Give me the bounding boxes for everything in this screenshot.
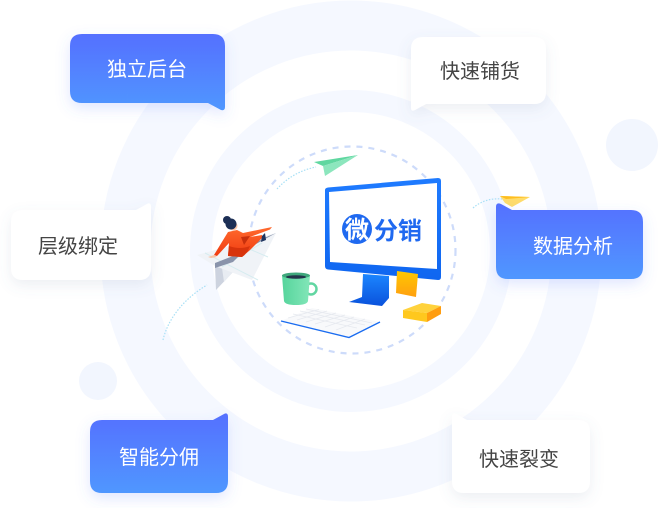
icon: yellow paper plane bbox=[500, 196, 530, 207]
decorative circle right bbox=[606, 119, 658, 171]
monitor screen bbox=[329, 183, 437, 269]
monitor stand bbox=[349, 274, 389, 306]
illustration: yellow block bbox=[403, 303, 441, 322]
plane wing bbox=[197, 233, 276, 280]
monitor body bbox=[325, 178, 441, 280]
background concentric rings bbox=[126, 26, 576, 476]
icon: green paper plane bbox=[314, 155, 358, 176]
dashed orbit circle bbox=[248, 146, 456, 354]
illustration: keyboard bbox=[281, 308, 380, 338]
label: 层级绑定 bbox=[38, 235, 118, 258]
label: 智能分佣 bbox=[119, 446, 199, 469]
callout: 快速裂变 bbox=[452, 413, 590, 493]
callout: 独立后台 bbox=[70, 34, 225, 110]
dotted flight trails bbox=[163, 167, 502, 340]
label: 独立后台 bbox=[107, 58, 187, 81]
illustration: sticky note bbox=[396, 271, 418, 297]
logo text: 分销 bbox=[374, 218, 422, 245]
person body bbox=[214, 227, 272, 257]
illustration: person on paper plane bbox=[197, 216, 276, 290]
decorative circle left bbox=[79, 362, 117, 400]
illustration: green mug bbox=[282, 272, 316, 305]
label: 快速铺货 bbox=[440, 60, 520, 83]
plane keel bbox=[215, 266, 233, 290]
illustration: monitor bbox=[325, 178, 441, 306]
callout: 层级绑定 bbox=[11, 203, 151, 280]
logo character: 微 bbox=[345, 217, 369, 244]
label: 数据分析 bbox=[533, 235, 613, 258]
callout: 智能分佣 bbox=[90, 413, 228, 493]
head bbox=[228, 222, 238, 230]
label: 快速裂变 bbox=[479, 448, 559, 471]
callout: 快速铺货 bbox=[411, 37, 546, 111]
callout: 数据分析 bbox=[496, 203, 643, 279]
logo circle bbox=[342, 214, 372, 244]
